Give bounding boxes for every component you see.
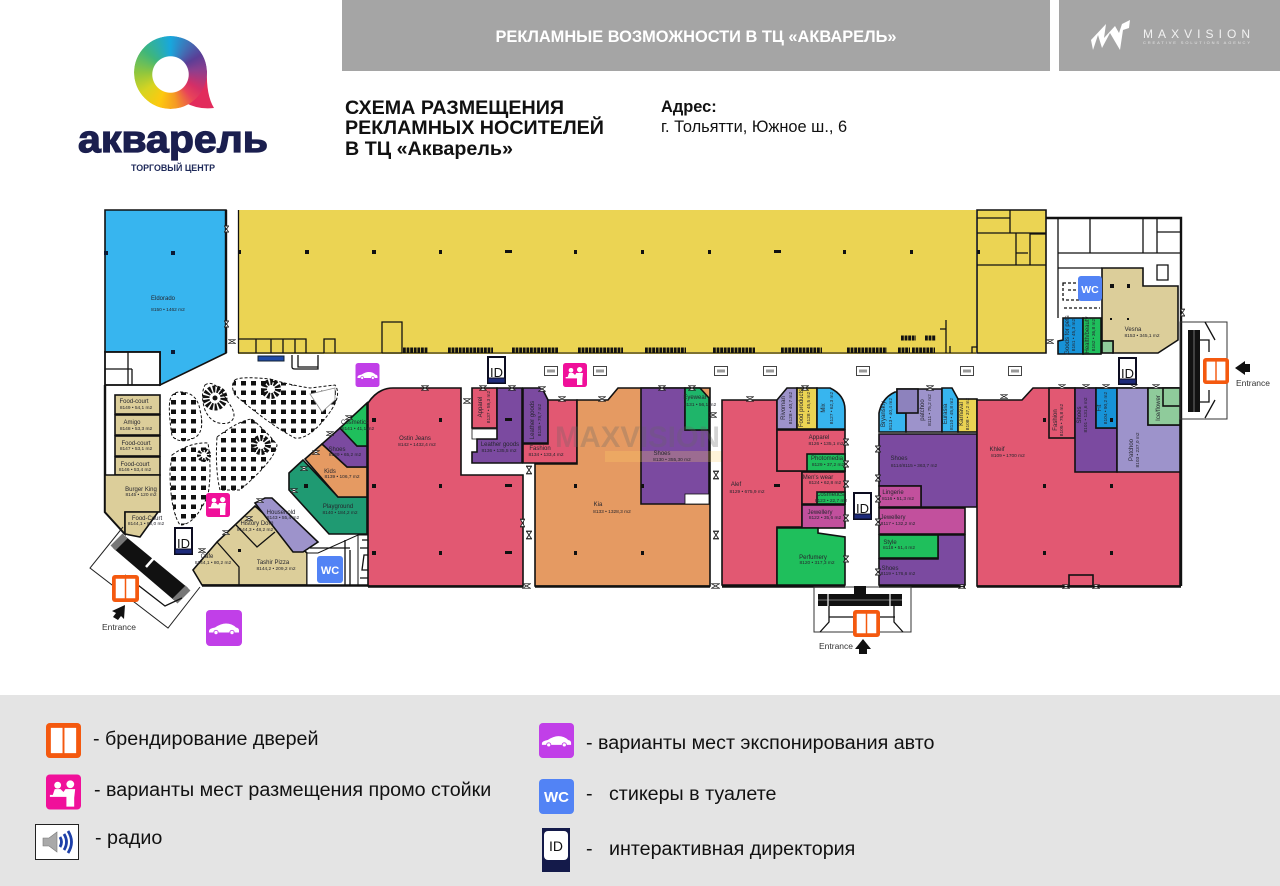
floor plan [90, 210, 1270, 654]
food court units [105, 395, 160, 537]
center wing left tenants [722, 388, 845, 585]
ID icon: food court [175, 528, 192, 554]
store labels: 8147 • 53,1 m2 [120, 446, 153, 452]
store labels: Fit [1097, 404, 1103, 411]
store labels: 8140 • 184,2 m2 [322, 510, 358, 516]
car icon: bottom [206, 610, 242, 646]
legend: door branding [46, 723, 319, 758]
door branding icon: left entrance [112, 575, 139, 602]
ID icon: corridor centre: ID [856, 501, 869, 516]
Maxvision logo block [1059, 0, 1280, 71]
store labels: Rivoman [781, 396, 787, 420]
store labels: 8144,3 • 48,2 m2 [237, 527, 274, 533]
scheme title: В ТЦ «Акварель» [345, 138, 513, 160]
legend: promo stand: - варианты мест размещения промо стойки [94, 779, 491, 801]
store labels: 8137 • 59,3 m2 [486, 390, 492, 423]
store labels: Burger King [125, 487, 157, 493]
store labels: Khleif [989, 447, 1005, 453]
store labels: 8134 • 133,4 m2 [528, 452, 564, 458]
store labels: Leather goods [481, 442, 519, 448]
store labels: 8131 • 56,1 m2 [684, 402, 717, 408]
door branding icon: bottom entrance [853, 610, 880, 637]
store labels: 8104 • 90,2 m2 [1103, 391, 1109, 424]
store labels: History Dom [240, 521, 274, 527]
store labels: Playground [323, 504, 353, 510]
legend: radio [36, 824, 162, 860]
store labels: 8133 • 1328,3 m2 [593, 509, 631, 515]
center wing right tenants [879, 388, 977, 585]
arrow: left entrance [112, 605, 125, 620]
legend: toilet stickers [539, 779, 776, 814]
store labels: 8139 • 65,2 m2 [329, 452, 362, 458]
promo icon: food court [206, 493, 230, 517]
store labels: Shoes [890, 456, 908, 462]
shoes and eyewear [641, 388, 709, 504]
store labels: 8105 • 75,8 m2 [1059, 403, 1065, 436]
Akvarel logo: ТОРГОВЫЙ ЦЕНТР [131, 162, 216, 174]
store labels: 8120 • 317,3 m2 [799, 560, 835, 566]
watermark: MAXVISION [555, 421, 720, 454]
store labels: 8145 • 120 m2 [125, 492, 157, 498]
store labels: Cafe [201, 554, 214, 560]
address: г. Тольятти, Южное ш., 6 [661, 118, 847, 136]
arrow: bottom entrance [855, 639, 871, 654]
store labels: 8119 • 176,6 m2 [881, 571, 916, 577]
store labels: Food-court [119, 399, 149, 405]
address: Адрес: [661, 98, 717, 116]
store labels: 8126 • 135,1 m2 [808, 441, 844, 447]
store labels: 8128 • 40,7 m2 [788, 391, 794, 424]
scheme title [345, 97, 604, 160]
door marks [198, 226, 1185, 588]
store labels: 8162 • 36,8 m2 [1091, 318, 1097, 351]
store labels: Food-Court [132, 516, 162, 522]
arrow: right entrance [1235, 361, 1250, 375]
store number tags [544, 366, 1022, 376]
store labels: Health/beauty [1085, 316, 1091, 354]
legend: toilet stickers: - стикеры в туалете [586, 783, 776, 805]
store labels: Men's wear [803, 475, 833, 481]
Ostin Jeans [368, 388, 523, 586]
store labels: 8127 • 62,3 m2 [829, 391, 835, 424]
Khleif store [977, 388, 1180, 586]
legend: promo stand [46, 774, 491, 810]
store labels: Tashir Pizza [257, 560, 290, 566]
store labels: 8116 • 51,3 m2 [882, 496, 914, 502]
apparel and leather row [472, 388, 577, 463]
store labels: Style [883, 540, 897, 546]
ID icon: corridor right: ID [1121, 366, 1134, 381]
store labels: 8113 • 40,4 m2 [888, 398, 894, 430]
store labels: 8111 • 75,2 m2 [927, 394, 933, 426]
Vesna store [1102, 268, 1178, 353]
store labels: Perfumery [799, 555, 827, 561]
store labels: Amigo [123, 420, 141, 426]
store labels: 8135 • 79,7 m2 [537, 403, 543, 436]
store labels: Cosmetics [816, 492, 844, 498]
WC icon: right [1078, 276, 1102, 301]
legend [36, 723, 934, 872]
store labels: 8149 • 54,1 m2 [120, 405, 153, 411]
Akvarel logo: акварель [78, 119, 268, 161]
seating area [169, 378, 338, 525]
store labels: Cosmetics [341, 420, 369, 426]
store labels: 8122 • 35,6 m2 [809, 515, 842, 521]
store labels: 8109 • 1700 m2 [991, 453, 1025, 459]
store labels: Fashion [529, 446, 551, 452]
store labels: 8110 • 45,8 m2 [949, 398, 955, 430]
store labels: Leather goods [530, 401, 536, 439]
label: right entrance: Entrance [1236, 378, 1270, 388]
Maxvision logo block: MAXVISION [1143, 27, 1250, 41]
legend: car display: - варианты мест экспонирования авто [586, 732, 934, 754]
legend: car display [539, 723, 934, 758]
yellow anchor store [238, 210, 1046, 369]
store labels: Household [267, 510, 295, 516]
store labels: Ostin Jeans [399, 436, 431, 442]
store labels: 8144,1 • 80,2 m2 [195, 560, 232, 566]
WC icon: left [317, 556, 343, 583]
Kia store [535, 388, 710, 586]
store labels: Kids [324, 469, 336, 475]
store labels: 8108 • 37,2 m2 [965, 397, 971, 430]
store labels: Kia [594, 502, 603, 508]
store labels: 8117 • 132,2 m2 [881, 521, 916, 527]
store labels: 8161 • 45,3 m2 [1071, 318, 1077, 351]
store labels [119, 296, 1162, 577]
legend: interactive directory [542, 828, 855, 872]
store labels: Food-court [121, 441, 151, 447]
store labels: 8146 • 53,4 m2 [119, 467, 152, 473]
ID icon: corridor centre [854, 493, 871, 519]
outer walls [202, 210, 1181, 586]
store labels: 8129 • 675,9 m2 [729, 489, 765, 495]
store labels: 8139 • 106,7 m2 [324, 474, 360, 480]
scheme title: РЕКЛАМНЫХ НОСИТЕЛЕЙ [345, 117, 604, 139]
legend background [0, 695, 1280, 886]
store labels: Food products [799, 389, 805, 427]
header bar: РЕКЛАМНЫЕ ВОЗМОЖНОСТИ В ТЦ «АКВАРЕЛЬ» [495, 28, 897, 46]
store labels: 8128 • 45,5 m2 [806, 391, 812, 424]
store labels: 8129 • 37,2 m2 [812, 462, 845, 468]
lower-left restaurants [193, 498, 318, 585]
store labels: 8153 • 345,1 m2 [1124, 333, 1160, 339]
store labels: Mix [821, 403, 827, 413]
right entrance [1180, 322, 1227, 419]
ID icon: corridor left [488, 357, 505, 383]
store labels: 8103 • 237,0 m2 [1135, 432, 1141, 468]
left wing tenants [289, 403, 373, 585]
store labels: 8150 • 1462 m2 [151, 307, 185, 313]
store labels: 8114/8115 • 363,7 m2 [891, 463, 937, 469]
store labels: Eurasia [943, 403, 949, 424]
bottom entrance [814, 586, 911, 632]
address [661, 98, 847, 136]
vesna neighbour units [1058, 318, 1113, 354]
store labels: 8148 • 53,3 m2 [120, 426, 153, 432]
store labels: Shoes [1077, 406, 1083, 424]
store labels: Jewellery [880, 515, 906, 521]
upper right service rooms [1046, 218, 1181, 586]
store labels: Photomedia [811, 456, 844, 462]
legend: interactive directory: - интерактивная директория [586, 838, 855, 860]
legend: door branding: - брендирование дверей [93, 728, 319, 750]
store labels: Patchoo [1129, 438, 1135, 461]
store labels: 8123 • 22,7 m2 [815, 498, 848, 504]
store labels: 8144,1 • 80,0 m2 [128, 521, 165, 527]
store labels: Fashion [1053, 409, 1059, 431]
WC icon: right: WC [1081, 284, 1099, 296]
ID icon: food court: ID [177, 536, 190, 551]
pillars [238, 284, 1130, 555]
store labels: Food-court [120, 462, 150, 468]
store labels: Apparel [809, 435, 829, 441]
promo icon: corridor [563, 363, 587, 387]
store labels: Shoes [328, 447, 346, 453]
scheme title: СХЕМА РАЗМЕЩЕНИЯ [345, 97, 564, 119]
store labels: Ice/flower [1156, 395, 1162, 421]
store labels: Karnaval [959, 402, 965, 426]
store labels: 8118 • 51,4 m2 [883, 545, 915, 551]
legend: radio: - радио [95, 827, 162, 849]
door branding icon: right entrance [1203, 358, 1229, 384]
store labels: Goods for pets [1065, 315, 1071, 355]
store labels: 8101 • 131,6 m2 [1083, 397, 1089, 433]
ID icon: corridor left: ID [490, 365, 503, 380]
store labels: 8141 • 41,1 m2 [342, 426, 375, 432]
store labels: Lingerie [882, 490, 904, 496]
legend: toilet stickers: WC [544, 789, 569, 806]
store labels: Shoes [653, 451, 671, 457]
store labels: 8130 • 355,30 m2 [653, 457, 691, 463]
store labels: 8124 • 62,8 m2 [809, 480, 842, 486]
left entrance [90, 527, 200, 628]
store labels: patchoo [920, 399, 926, 421]
Maxvision logo block: CREATIVE SOLUTIONS AGENCY [1143, 40, 1250, 45]
store labels: 8144,2 • 209,2 m2 [256, 566, 296, 572]
car icon: top [356, 363, 380, 387]
store labels: 8142 • 1432,4 m2 [398, 442, 436, 448]
store labels: Eldorado [151, 296, 176, 302]
store labels: Alef [731, 482, 742, 488]
store labels: Vesna [1125, 327, 1142, 333]
header bar [342, 0, 1050, 71]
label: left entrance: Entrance [102, 622, 136, 632]
store labels: Eyewear [683, 395, 707, 401]
Eldorado store [105, 210, 226, 385]
WC icon: left: WC [321, 565, 339, 577]
store labels: Apparel [478, 397, 484, 417]
ID icon: corridor right [1119, 358, 1136, 384]
store labels: 8143 • 55,4 m2 [267, 515, 300, 521]
store labels: Jewellery [807, 510, 833, 516]
Akvarel logo [78, 36, 268, 174]
legend: interactive directory: ID [549, 838, 563, 854]
store labels: Shoes [881, 566, 899, 572]
label: bottom entrance: Entrance [819, 641, 853, 651]
store labels: Bryanskiy [881, 401, 887, 427]
store labels: 8136 • 135,5 m2 [481, 448, 517, 454]
